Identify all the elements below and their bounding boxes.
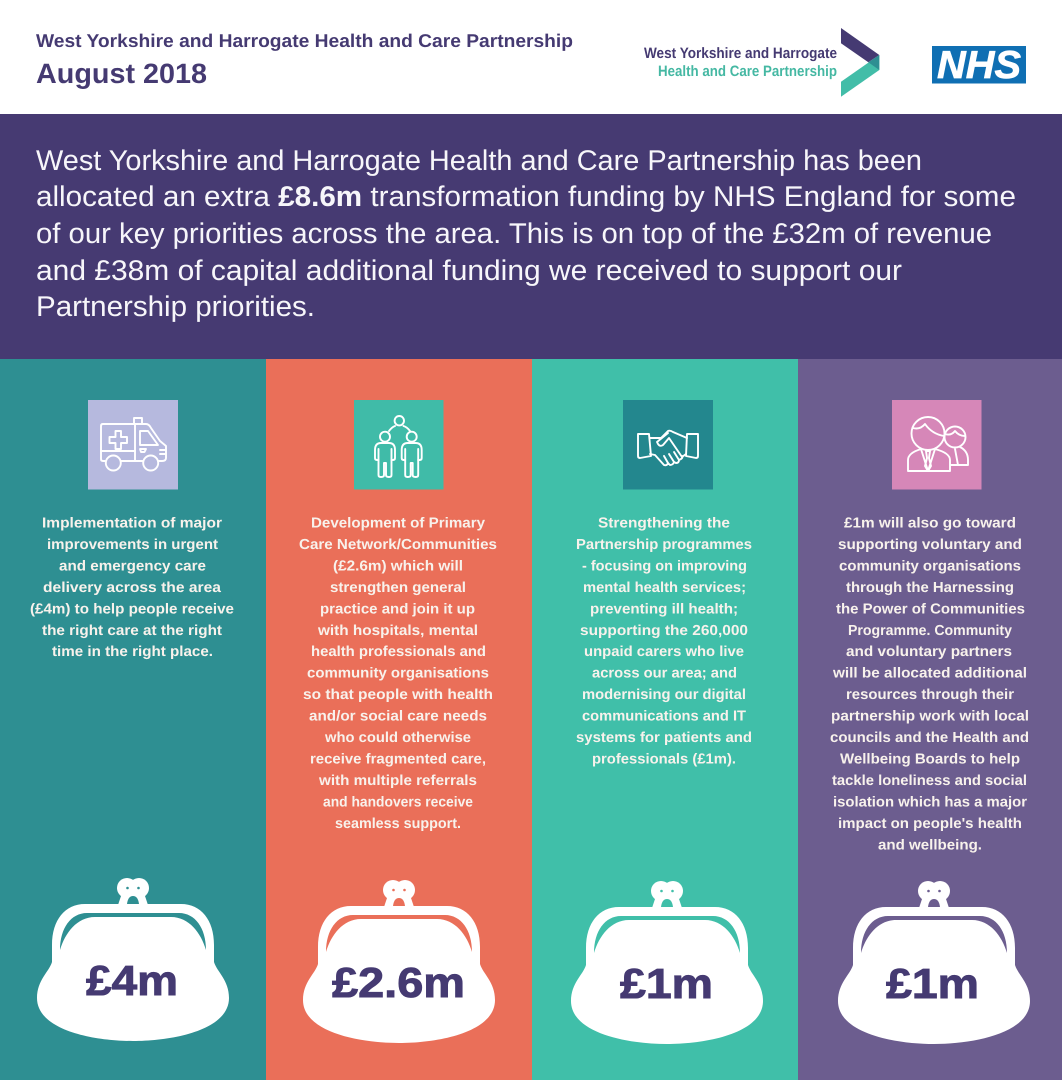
panel text: (£2.6m) which will [333,558,463,574]
panel text: systems for patients and [576,730,752,746]
partnership logo: West Yorkshire and Harrogate [644,45,837,62]
panel text: (£4m) to help people receive [30,601,234,617]
icon: ambulance [88,400,178,490]
panel text: improvements in urgent [47,537,218,553]
icon: people network [354,400,444,490]
panel text: through the Harnessing [846,580,1014,596]
panel text: impact on people's health [838,816,1022,832]
panel text: health professionals and [311,644,486,660]
panel text: with multiple referrals [318,773,477,789]
intro panel: Partnership priorities. [36,291,315,323]
icon: purse £4m: £4m [86,957,178,1004]
panel text: Programme. Community [848,623,1012,639]
panel text: and wellbeing. [878,837,982,853]
icon: purse £2.6m [303,880,495,1043]
partnership logo [644,28,879,97]
panel text: and emergency care [59,558,206,574]
header title: West Yorkshire and Harrogate Health and Care Partnership [36,30,573,51]
panel text: unpaid carers who live [584,644,744,660]
NHS logo: NHS [937,44,1021,87]
panel text [830,516,1029,853]
panel: strengthening the partnership [532,359,798,1080]
panel: primary care networks [266,359,532,1080]
panel text: practice and join it up [320,601,475,617]
panel text: and handovers receive [323,794,473,810]
panel: urgent and emergency care [0,359,266,1080]
panel text: supporting voluntary and [838,537,1022,553]
header date: August 2018 [36,58,207,89]
panel text: isolation which has a major [833,794,1027,810]
panel text: communications and IT [582,709,746,725]
panel text: preventing ill health; [590,601,738,617]
intro panel: of our key priorities across the area. This is on top of the £32m of revenue [36,218,992,250]
panel text: receive fragmented care, [310,752,486,768]
panel text: supporting the 260,000 [580,623,748,639]
panel text: Care Network/Communities [299,537,497,553]
panel: harnessing the power of communities [798,359,1062,1080]
panel text: modernising our digital [582,687,746,703]
panel text: Implementation of major [42,516,222,532]
panel text [299,516,497,832]
panel text: Wellbeing Boards to help [840,752,1020,768]
intro panel [0,114,1062,359]
intro panel: West Yorkshire and Harrogate Health and Care Partnership has been [36,145,922,177]
panel text: will be allocated additional [832,666,1027,682]
panel text: across our area; and [592,666,737,682]
intro panel: allocated an extra £8.6m transformation funding by NHS England for some [36,181,1016,213]
intro panel: and £38m of capital additional funding we received to support our [36,255,903,287]
icon: handshake [623,400,713,490]
panel text: and/or social care needs [309,709,487,725]
panel text: professionals (£1m). [592,752,736,768]
panel text [30,516,234,660]
panel text: the right care at the right [42,623,222,639]
panel text: tackle loneliness and social [832,773,1027,789]
icon: business people [892,400,982,490]
panel text: time in the right place. [52,644,213,660]
panel text: £1m will also go toward [844,516,1016,532]
header band [0,0,1062,114]
panel text: resources through their [846,687,1014,703]
panel text: and voluntary partners [846,644,1012,660]
panel text: mental health services; [583,580,746,596]
panel text: Development of Primary [311,516,485,532]
panel text: community organisations [307,666,489,682]
panel text: community organisations [839,558,1021,574]
icon: purse £1m: £1m [620,960,713,1007]
icon: purse £4m [37,878,229,1041]
icon: purse £1m [571,881,763,1044]
panel text: Strengthening the [598,516,730,532]
icon: purse £2.6m: £2.6m [332,959,465,1006]
icon: purse £1m: £1m [886,960,979,1007]
panel text: delivery across the area [43,580,222,596]
panel text: seamless support. [335,816,461,832]
panel text: councils and the Health and [830,730,1029,746]
panel text: with hospitals, mental [317,623,478,639]
partnership logo: Health and Care Partnership [658,63,837,80]
panel text: the Power of Communities [836,601,1025,617]
panel text: partnership work with local [831,709,1029,725]
panel text: strengthen general [330,580,466,596]
icon: purse £1m [838,881,1030,1044]
panel text: who could otherwise [324,730,471,746]
panel text: so that people with health [303,687,493,703]
panel text [576,516,752,768]
panel text: - focusing on improving [582,558,747,574]
panel text: Partnership programmes [576,537,752,553]
